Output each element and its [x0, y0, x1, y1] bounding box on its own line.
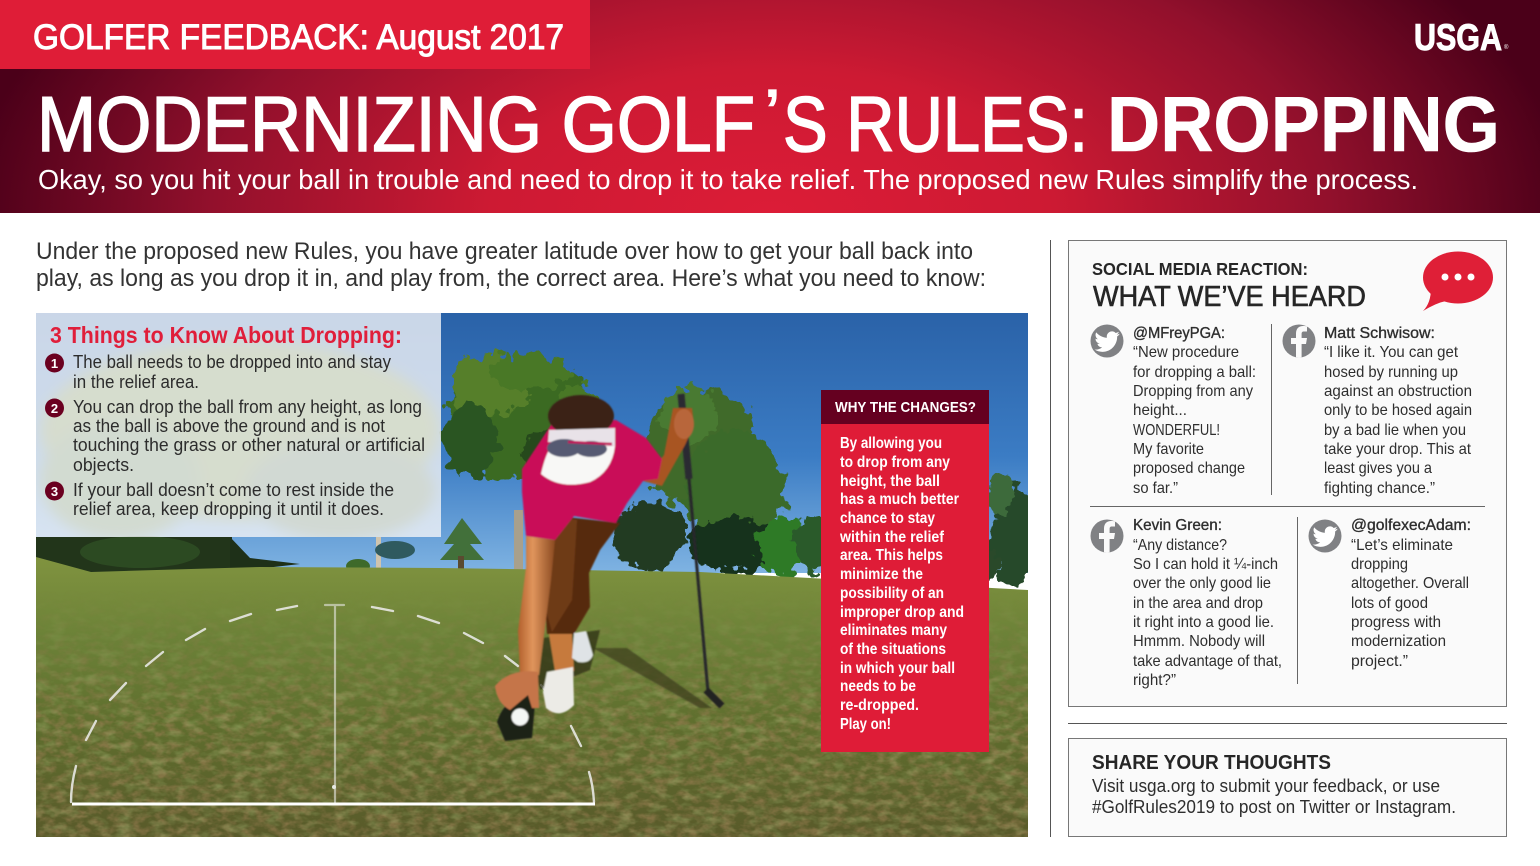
- comment: Matt Schwisow: only to be hosed again: [1324, 402, 1472, 419]
- comment: Matt Schwisow: “I like it. You can get: [1324, 344, 1459, 361]
- comment: MFreyPGA: height...: [1133, 402, 1187, 419]
- item 1: [45, 352, 391, 392]
- icon: speech bubble: [1423, 252, 1493, 311]
- panel: 3 things to know: [36, 313, 441, 537]
- comment: golfexecAdam: dropping: [1351, 556, 1408, 573]
- callout body: minimize the: [840, 566, 923, 583]
- callout body: needs to be: [840, 678, 916, 695]
- comment: Matt Schwisow: least gives you a: [1324, 460, 1432, 477]
- comment: Kevin Green: over the only good lie: [1133, 575, 1271, 592]
- comment: golfexecAdam: “Let’s eliminate: [1351, 537, 1453, 554]
- comment: golfexecAdam: [1308, 517, 1471, 670]
- comment: golfexecAdam: @golfexecAdam:: [1351, 517, 1471, 534]
- item 2: objects.: [73, 455, 134, 475]
- item 2: [45, 397, 425, 475]
- callout body: possibility of an: [840, 585, 944, 602]
- item 1: The ball needs to be dropped into and stay: [73, 352, 391, 372]
- photo: golfer dropping a ball: [36, 313, 1036, 837]
- item 1: in the relief area.: [73, 372, 199, 392]
- comment: MFreyPGA: “New procedure: [1133, 344, 1239, 361]
- main title: [37, 77, 1500, 168]
- comment: MFreyPGA: proposed change: [1133, 460, 1245, 477]
- main title: DROPPING: [1107, 80, 1500, 168]
- callout: why the changes: [821, 390, 989, 752]
- tree behind panel: [40, 340, 440, 540]
- panel: share your thoughts: [1068, 738, 1506, 836]
- subtitle: Okay, so you hit your ball in trouble and need to drop it to take relief. The proposed new Rules simplify the process.: [38, 164, 1418, 195]
- right trees: [612, 387, 1036, 587]
- comment: Kevin Green: So I can hold it ¼-inch: [1133, 556, 1278, 573]
- comment: Matt Schwisow: against an obstruction: [1324, 383, 1472, 400]
- comment: Kevin Green: [1090, 517, 1282, 689]
- main title: ’: [764, 77, 781, 144]
- comment: MFreyPGA: so far.”: [1133, 480, 1178, 497]
- comment: Kevin Green: Kevin Green:: [1133, 517, 1222, 534]
- item 3: If your ball doesn’t come to rest inside the: [73, 480, 394, 500]
- intro text: Under the proposed new Rules, you have greater latitude over how to get your ball back into: [36, 238, 973, 265]
- callout body: in which your ball: [840, 660, 955, 677]
- panel: social media reaction: [1068, 240, 1506, 706]
- comment: Kevin Green: “Any distance?: [1133, 537, 1227, 554]
- item 3: relief area, keep dropping it until it does.: [73, 499, 384, 519]
- date tab: GOLFER FEEDBACK: August 2017: [33, 18, 564, 57]
- comment: MFreyPGA: for dropping a ball:: [1133, 364, 1256, 381]
- date tab: [0, 0, 590, 69]
- comment: Kevin Green: in the area and drop: [1133, 595, 1263, 612]
- panel: share your thoughts: SHARE YOUR THOUGHTS: [1092, 752, 1331, 774]
- item 1: 1: [51, 356, 58, 371]
- item 3: 3: [51, 484, 58, 499]
- heading: SOCIAL MEDIA REACTION:: [1092, 259, 1308, 279]
- comment: Matt Schwisow: Matt Schwisow:: [1324, 325, 1435, 342]
- callout body: height, the ball: [840, 473, 940, 490]
- callout: why the changes: WHY THE CHANGES?: [835, 399, 976, 416]
- callout body: of the situations: [840, 641, 946, 658]
- callout body: chance to stay: [840, 510, 935, 527]
- item 2: as the ball is above the ground and is not: [73, 416, 385, 436]
- callout body: improper drop and: [840, 604, 964, 621]
- golfer: [495, 394, 722, 741]
- comment: golfexecAdam: progress with: [1351, 614, 1441, 631]
- item 3: [45, 480, 394, 519]
- comment: Matt Schwisow: take your drop. This at: [1324, 441, 1472, 458]
- intro text: [36, 238, 986, 292]
- comment: MFreyPGA: @MFreyPGA:: [1133, 325, 1225, 342]
- callout body: to drop from any: [840, 454, 950, 471]
- item 2: You can drop the ball from any height, as long: [73, 397, 422, 417]
- comment: golfexecAdam: project.”: [1351, 653, 1408, 670]
- callout body: eliminates many: [840, 622, 947, 639]
- USGA logo: USGA: [1414, 17, 1502, 58]
- comment: Kevin Green: take advantage of that,: [1133, 653, 1282, 670]
- USGA logo: ®: [1504, 44, 1509, 51]
- main title: S RULES:: [783, 80, 1088, 168]
- item 2: 2: [51, 401, 58, 416]
- callout body: By allowing you: [840, 435, 942, 452]
- header banner: [0, 0, 1540, 213]
- distant tree line: [36, 510, 523, 573]
- callout body: Play on!: [840, 716, 891, 733]
- comment: Matt Schwisow: by a bad lie when you: [1324, 422, 1466, 439]
- comment: Kevin Green: it right into a good lie.: [1133, 614, 1274, 631]
- comment: golfexecAdam: altogether. Overall: [1351, 575, 1469, 592]
- intro text: play, as long as you drop it in, and play from, the correct area. Here’s what you need to know:: [36, 265, 986, 292]
- callout body: re-dropped.: [840, 697, 919, 714]
- heading: [1092, 259, 1366, 313]
- callout body: [839, 435, 964, 733]
- club: [681, 394, 722, 706]
- item 2: touching the grass or other natural or artificial: [73, 435, 425, 455]
- heading: WHAT WE’VE HEARD: [1093, 281, 1366, 313]
- large left tree: [442, 352, 600, 479]
- comment: golfexecAdam: modernization: [1351, 633, 1446, 650]
- comment: Kevin Green: Hmmm. Nobody will: [1133, 633, 1265, 650]
- panel heading: 3 Things to Know About Dropping:: [50, 322, 402, 348]
- comment: MFreyPGA: My favorite: [1133, 441, 1204, 458]
- comment: golfexecAdam: lots of good: [1351, 595, 1428, 612]
- relief area arc: [71, 605, 595, 804]
- comment: Matt Schwisow: hosed by running up: [1324, 364, 1458, 381]
- comment: Kevin Green: right?”: [1133, 672, 1176, 689]
- comment: MFreyPGA: Dropping from any: [1133, 383, 1253, 400]
- comment: Matt Schwisow: fighting chance.”: [1324, 480, 1435, 497]
- comment: Matt Schwisow: [1282, 324, 1472, 497]
- callout body: has a much better: [840, 491, 959, 508]
- fairway: [36, 557, 1028, 837]
- callout body: within the relief: [839, 529, 945, 546]
- comment: MFreyPGA: WONDERFUL!: [1133, 422, 1220, 439]
- panel: share your thoughts: #GolfRules2019 to post on Twitter or Instagram.: [1092, 797, 1456, 817]
- panel: share your thoughts: Visit usga.org to submit your feedback, or use: [1092, 776, 1440, 796]
- main title: MODERNIZING GOLF: [37, 80, 755, 168]
- comment: MFreyPGA: [1090, 324, 1256, 497]
- callout body: area. This helps: [840, 547, 943, 564]
